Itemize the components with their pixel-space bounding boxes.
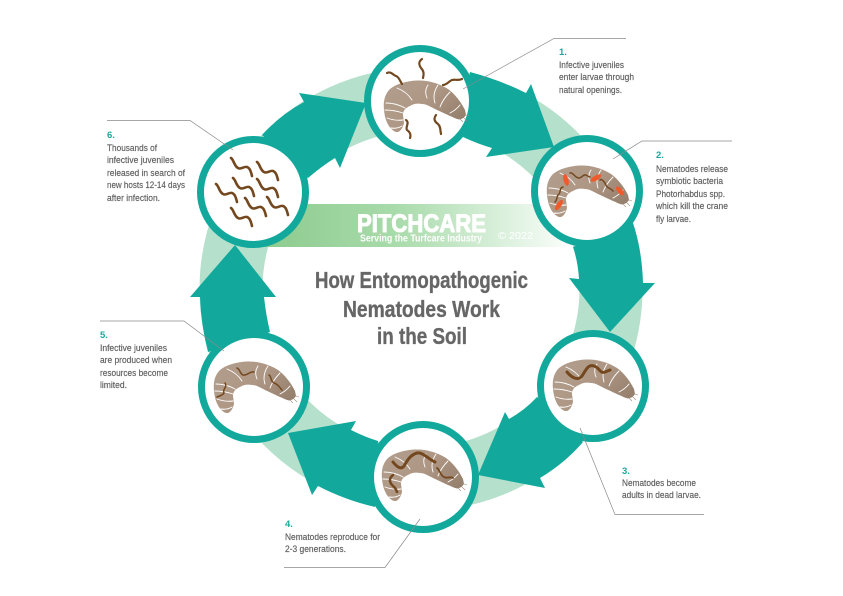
arrow: step 6 to 1 (262, 93, 366, 178)
step 6 text: new hosts 12-14 days (107, 180, 185, 190)
leader line 4 (284, 519, 420, 568)
title: in the Soil (377, 323, 467, 349)
step 2 text: which kill the crane (655, 201, 728, 211)
banner: Pitchcare: © 2022 (498, 231, 533, 242)
arrow: step 3 to 4 (478, 397, 583, 488)
leader line 1 (463, 38, 626, 89)
banner: Pitchcare (262, 204, 562, 247)
step 2 text: Photorhabdus spp. (656, 189, 725, 199)
step 6 text: after infection. (107, 193, 160, 203)
title (315, 267, 528, 349)
leader line 6 (107, 120, 233, 150)
step 1 text: enter larvae through (559, 72, 634, 82)
banner: Pitchcare: Serving the Turfcare Industry (360, 234, 482, 244)
circle 4: reproducing nematodes (370, 424, 476, 530)
step 3 text (622, 466, 701, 500)
step 5 text (100, 330, 172, 390)
step 3 text: Nematodes become (622, 478, 696, 488)
circle 1: juveniles entering larva (368, 48, 472, 154)
step 2 text: fly larvae. (656, 214, 691, 224)
step 1 text: Infective juveniles (559, 60, 624, 70)
step 6 text (107, 130, 185, 203)
step 5 text: Infective juveniles (100, 343, 167, 353)
step 1 text: natural openings. (559, 85, 622, 95)
circle 5: infective juveniles produced (202, 334, 306, 440)
background ring (231, 99, 611, 479)
title: Nematodes Work (343, 296, 500, 322)
leader line 3 (580, 428, 704, 514)
step 6 text: Thousands of (107, 143, 157, 153)
leader line 5 (100, 321, 224, 351)
step 2 text: Nematodes release (656, 164, 728, 174)
step 2 text: symbiotic bacteria (656, 176, 723, 186)
step 4 text: Nematodes reproduce for (285, 532, 380, 542)
arrow: step 4 to 5 (288, 421, 378, 507)
step 4 text: 4. (285, 519, 293, 530)
step 5 text: 5. (100, 330, 108, 341)
step 6 text: 6. (107, 130, 115, 141)
step 2 text (655, 150, 728, 224)
leader line 2 (613, 141, 732, 159)
circle 6: thousands of juveniles (200, 140, 306, 244)
arrow: step 5 to 6 (190, 245, 276, 352)
step 4 text (285, 519, 380, 554)
step 5 text: are produced when (100, 355, 172, 365)
step 1 text (559, 47, 634, 95)
circle 2: bacteria released (534, 138, 640, 244)
step 1 text: 1. (559, 47, 567, 58)
title: How Entomopathogenic (315, 267, 528, 293)
arrow: step 2 to 3 (569, 223, 655, 332)
step 2 text: 2. (656, 150, 664, 161)
step 3 text: 3. (622, 466, 630, 477)
step 6 text: released in search of (107, 168, 185, 178)
step 3 text: adults in dead larvae. (622, 490, 701, 500)
step 5 text: limited. (100, 380, 127, 390)
arrow: step 1 to 2 (463, 72, 554, 157)
step 6 text: infective juveniles (107, 155, 174, 165)
circle 3: adult nematode (540, 334, 646, 438)
step 4 text: 2-3 generations. (285, 544, 346, 554)
banner: Pitchcare: PITCHCARE (357, 210, 486, 238)
step 5 text: resources become (100, 368, 168, 378)
